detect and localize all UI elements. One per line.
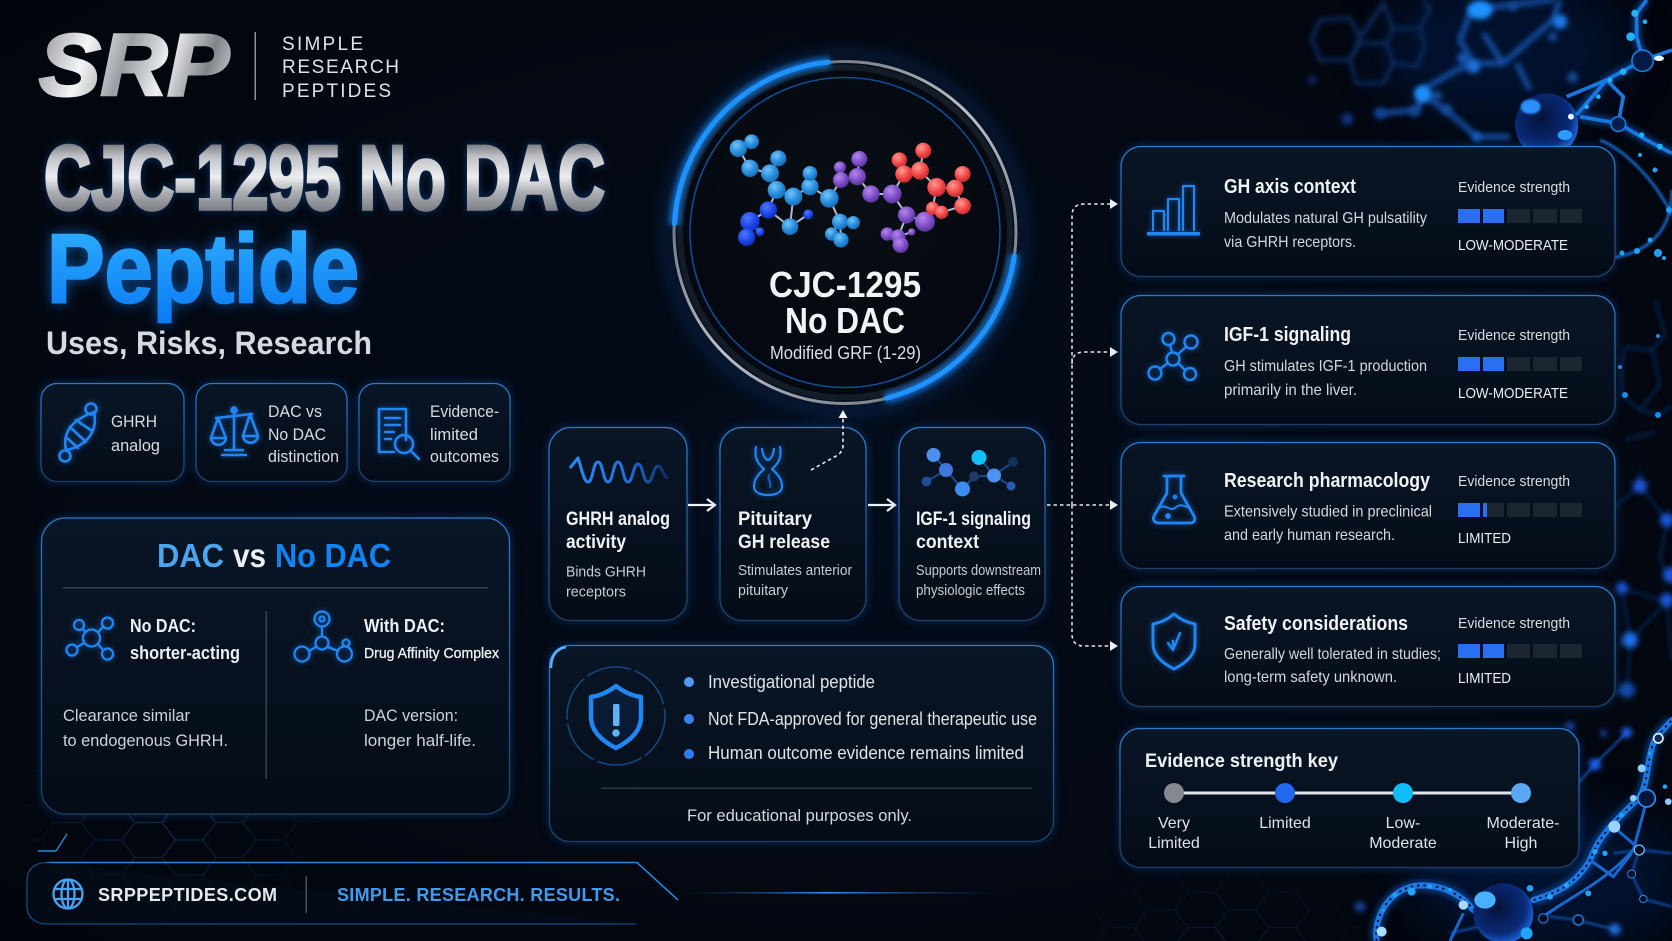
panel: evidence-limited chip: limited <box>430 425 478 444</box>
ring <box>674 62 1016 404</box>
heading: DAC <box>157 537 224 574</box>
with DAC text: Drug Affinity Complex <box>364 645 499 662</box>
panel: IGF-1 signaling context: physiologic effects <box>916 582 1025 599</box>
title: CJC-1295 No DAC <box>44 128 605 229</box>
panel: evidence-limited chip: Evidence- <box>430 402 499 421</box>
title <box>44 128 605 361</box>
panel: Pituitary GH release: Stimulates anterior <box>738 562 852 579</box>
footer bar <box>27 862 1008 924</box>
with DAC text: DAC version: <box>364 706 458 725</box>
with DAC text: With DAC: <box>364 616 445 636</box>
no DAC text: Clearance similar <box>63 706 190 725</box>
panel: evidence-limited chip: outcomes <box>430 447 499 466</box>
panel: DAC vs No DAC chip: No DAC <box>268 425 326 444</box>
evidence meter <box>1458 357 1582 371</box>
panel: GH axis context: GH axis context <box>1224 176 1356 198</box>
panel: GHRH analog chip: analog <box>111 436 160 455</box>
panel: Research pharmacology: Evidence strength <box>1458 473 1570 490</box>
heading <box>157 537 391 574</box>
icon: no DAC network <box>66 618 113 660</box>
logo tagline: SIMPLE <box>282 34 366 55</box>
scale labels: Limited <box>1259 815 1311 832</box>
heading: No DAC <box>275 537 391 574</box>
footer bar: SRPPEPTIDES.COM <box>98 885 277 905</box>
title: Uses, Risks, Research <box>46 325 372 361</box>
icon: DNA <box>60 404 96 462</box>
connector arrows to evidence cards <box>1047 199 1118 651</box>
no DAC text: to endogenous GHRH. <box>63 731 228 750</box>
warning list: Human outcome evidence remains limited <box>708 743 1024 763</box>
panel: Research pharmacology: Extensively studied in preclinical <box>1224 504 1432 520</box>
molecule <box>730 134 971 253</box>
panel: Evidence strength key <box>1120 728 1579 868</box>
logo mark: SRP: SRP <box>39 17 230 114</box>
panel: evidence-limited chip <box>359 384 510 482</box>
panel: DAC vs No DAC chip <box>196 384 347 482</box>
panel: IGF-1 signaling: primarily in the liver. <box>1224 382 1357 399</box>
icon: flask <box>1153 476 1195 523</box>
warning list <box>684 672 1037 763</box>
panel: Pituitary GH release: pituitary <box>738 582 788 599</box>
icon: document search <box>379 409 419 459</box>
logo tagline <box>282 34 402 102</box>
icon: globe <box>54 880 82 908</box>
panel: IGF-1 signaling context: Supports downstream <box>916 562 1041 579</box>
panel: Research pharmacology: LIMITED <box>1458 530 1511 547</box>
panel: Safety considerations <box>1121 586 1615 706</box>
panel: IGF-1 signaling context: context <box>916 532 980 553</box>
panel: GH axis context: Evidence strength <box>1458 179 1570 196</box>
panel: IGF-1 signaling: GH stimulates IGF-1 production <box>1224 358 1427 375</box>
scale labels: Very <box>1158 815 1190 832</box>
panel: safety notice <box>550 646 1054 842</box>
panel: IGF-1 signaling <box>1121 296 1615 424</box>
title: CJC-1295 No DAC <box>44 128 605 229</box>
with DAC text: longer half-life. <box>364 731 476 750</box>
panel: Safety considerations: long-term safety unknown. <box>1224 669 1397 686</box>
no DAC text <box>63 616 240 750</box>
badge label: CJC-1295 <box>769 264 921 305</box>
no DAC text: No DAC: <box>130 616 196 636</box>
panel: Safety considerations: LIMITED <box>1458 670 1511 687</box>
no DAC text: shorter-acting <box>130 643 240 663</box>
arrow <box>688 499 715 511</box>
panel: DAC vs No DAC chip: DAC vs <box>268 402 322 421</box>
logo <box>39 17 402 114</box>
evidence meter <box>1458 209 1582 223</box>
icon: bar chart <box>1147 186 1200 236</box>
panel: GHRH analog chip <box>41 384 184 482</box>
panel: safety notice: For educational purposes only. <box>687 806 912 825</box>
panel: Safety considerations: Evidence strength <box>1458 615 1570 632</box>
badge label: No DAC <box>785 300 905 341</box>
scale line <box>1164 783 1531 803</box>
panel: Pituitary GH release: GH release <box>738 532 830 553</box>
warning list: Not FDA-approved for general therapeutic use <box>708 709 1037 729</box>
badge label <box>769 264 921 363</box>
panel: GH axis context: Modulates natural GH pulsatility <box>1224 210 1427 227</box>
panel: Research pharmacology: Research pharmacology <box>1224 470 1431 492</box>
title: Peptide <box>47 214 359 323</box>
panel: GHRH analog activity <box>549 428 687 620</box>
panel: Research pharmacology <box>1121 442 1615 568</box>
panel: IGF-1 signaling: IGF-1 signaling <box>1224 324 1351 346</box>
scale labels: Low- <box>1386 815 1420 832</box>
footer bar: SIMPLE. RESEARCH. RESULTS. <box>337 885 620 905</box>
panel: DAC vs No DAC chip: distinction <box>268 447 339 466</box>
panel: GHRH analog chip: GHRH <box>111 412 157 431</box>
icon: signaling molecules <box>922 448 1018 496</box>
warning list: Investigational peptide <box>708 672 875 692</box>
panel: IGF-1 signaling context <box>899 428 1045 620</box>
with DAC text <box>364 616 499 750</box>
panel: GH axis context <box>1121 146 1615 276</box>
panel: GH axis context: via GHRH receptors. <box>1224 234 1356 251</box>
panel: GHRH analog activity: activity <box>566 532 626 553</box>
arrow <box>868 499 895 511</box>
logo tagline: RESEARCH <box>282 57 402 78</box>
evidence meter <box>1458 644 1582 658</box>
panel: DAC vs No DAC <box>42 518 510 814</box>
central molecule badge <box>667 54 1023 410</box>
icon: wave <box>570 458 668 482</box>
panel: Pituitary GH release <box>720 428 866 620</box>
icon: with DAC network <box>294 612 352 662</box>
scale labels <box>1148 815 1559 852</box>
panel: IGF-1 signaling: Evidence strength <box>1458 327 1570 344</box>
scale labels: High <box>1505 835 1537 852</box>
panel: GHRH analog activity: receptors <box>566 584 626 600</box>
panel: GH axis context: LOW-MODERATE <box>1458 237 1568 254</box>
logo tagline: PEPTIDES <box>282 81 394 102</box>
scale labels: Limited <box>1148 835 1200 852</box>
panel: IGF-1 signaling: LOW-MODERATE <box>1458 385 1568 402</box>
icon: warning shield <box>567 667 665 765</box>
title: Peptide <box>47 214 359 323</box>
arrow: pituitary to badge <box>811 410 848 470</box>
scale labels: Moderate- <box>1487 815 1559 832</box>
panel: Pituitary GH release: Pituitary <box>738 509 812 530</box>
panel: IGF-1 signaling context: IGF-1 signaling <box>916 509 1031 530</box>
scale labels: Moderate <box>1369 835 1437 852</box>
panel: Safety considerations: Safety considerations <box>1224 613 1408 635</box>
evidence meter <box>1458 503 1582 517</box>
panel: Research pharmacology: and early human research. <box>1224 527 1395 544</box>
panel: GHRH analog activity: Binds GHRH <box>566 564 646 580</box>
badge label: Modified GRF (1-29) <box>770 343 921 363</box>
panel: Safety considerations: Generally well tolerated in studies; <box>1224 646 1441 663</box>
heading: vs <box>233 537 266 574</box>
icon: check shield <box>1153 614 1195 669</box>
icon: network <box>1148 333 1198 380</box>
panel: GHRH analog activity: GHRH analog <box>566 509 670 530</box>
icon: pituitary <box>754 447 782 495</box>
panel: Evidence strength key: Evidence strength key <box>1145 751 1338 772</box>
icon: scales <box>211 408 258 455</box>
